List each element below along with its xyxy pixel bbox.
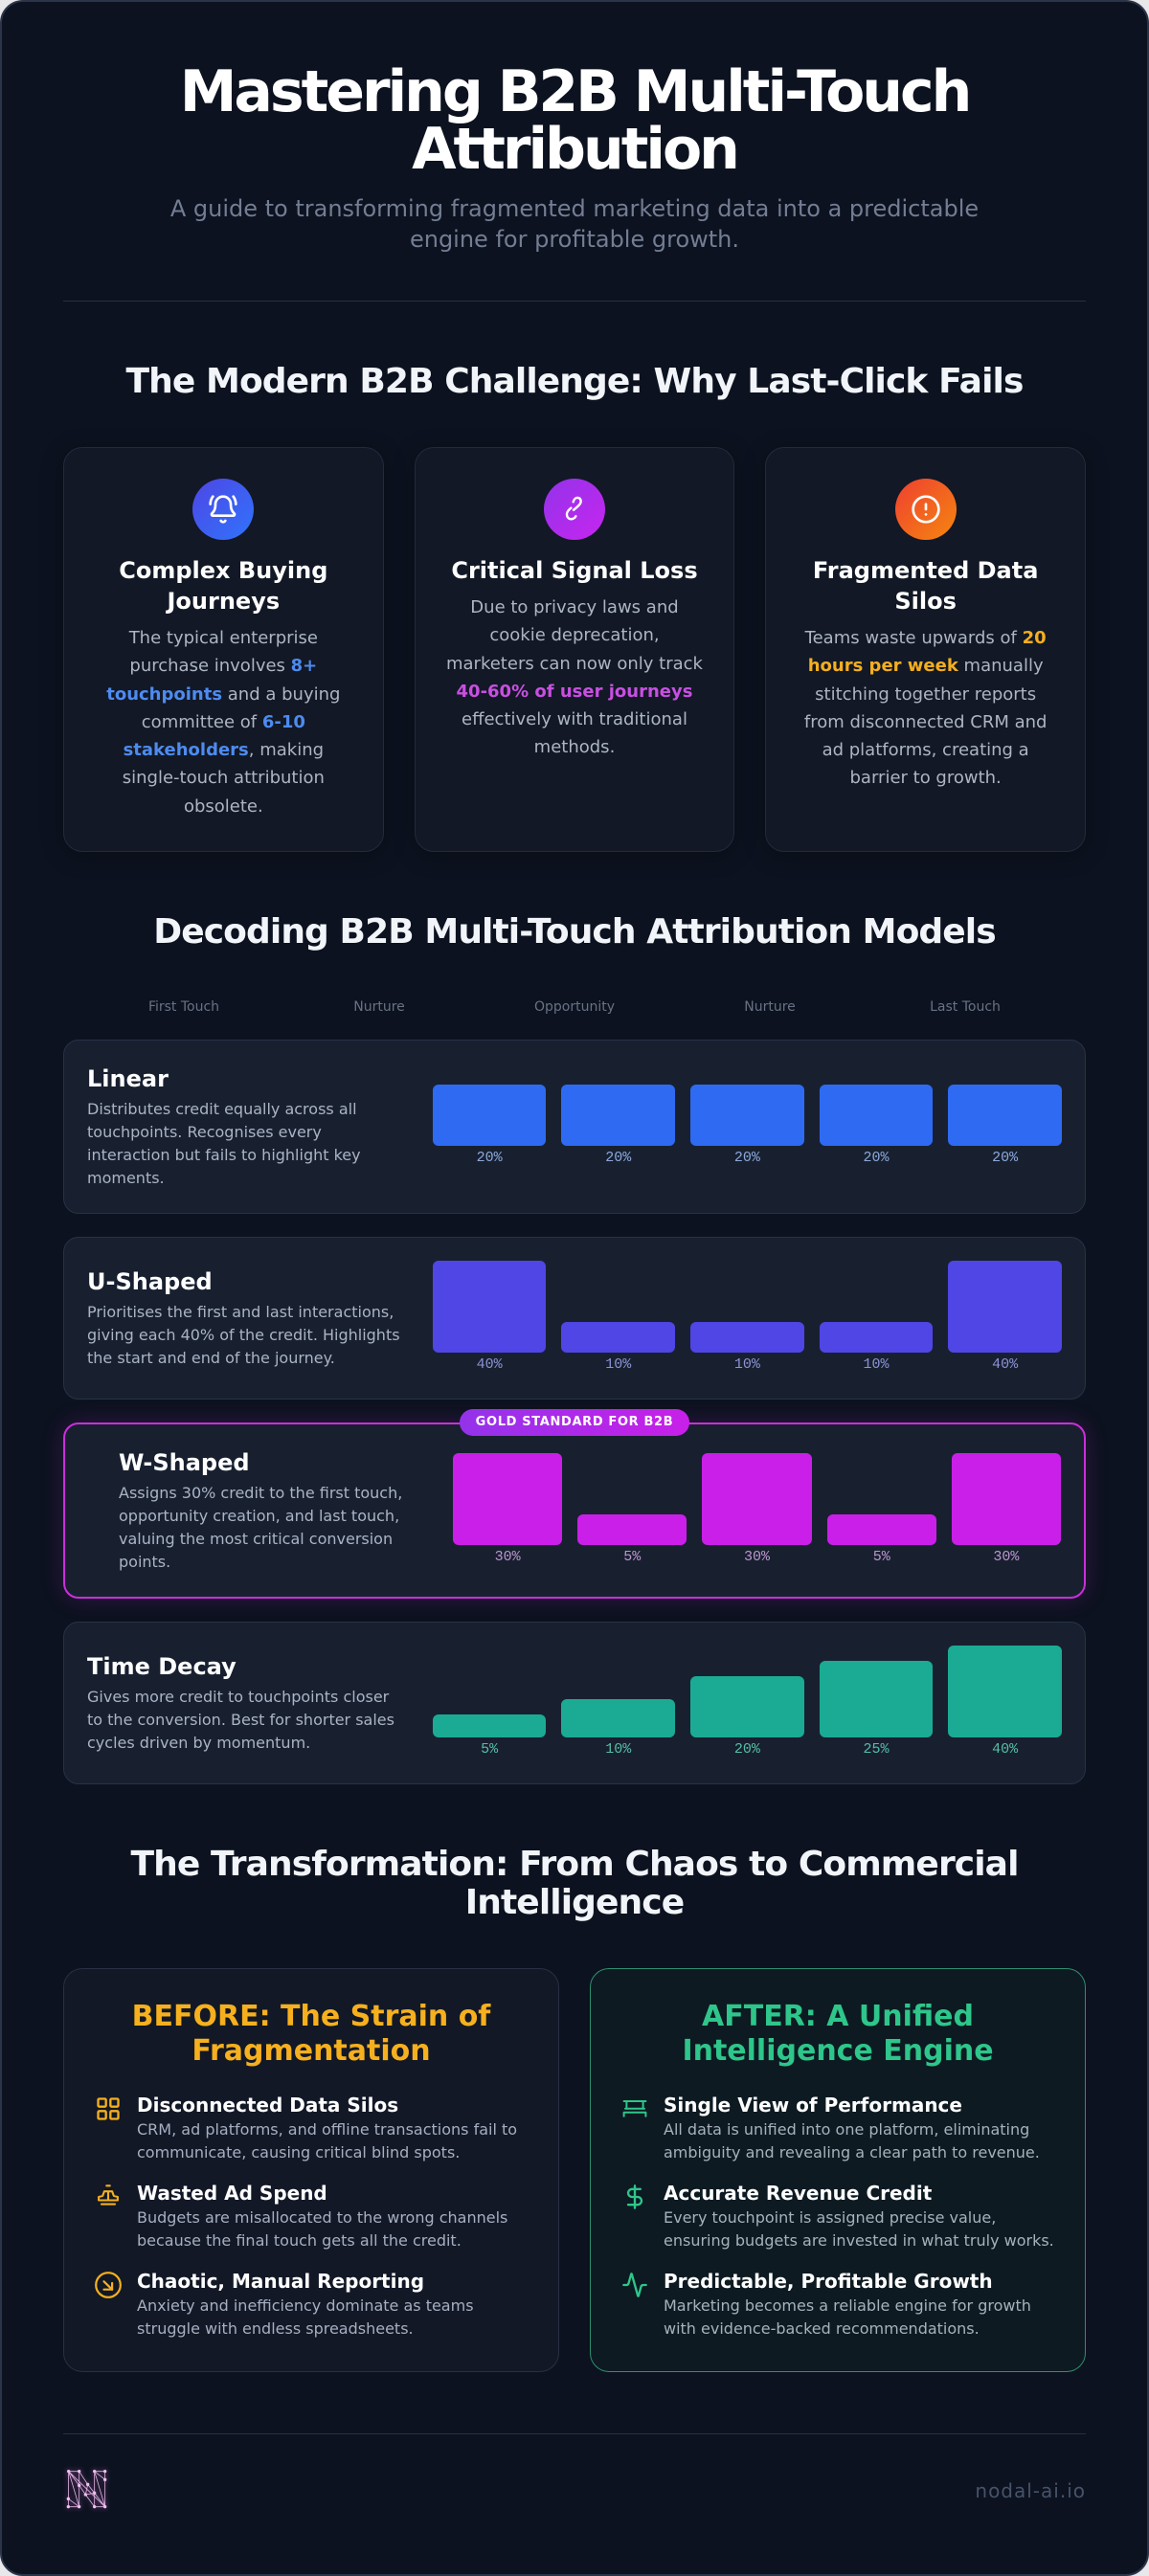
item: accurate revenue credit: Accurate Revenue Credit [664, 2182, 932, 2205]
item: disconnected data silos [97, 2094, 517, 2162]
panel: before [63, 1968, 559, 2372]
panel: linear model: 20% [864, 1150, 890, 1166]
card text: 40-60% of user journeys [457, 682, 692, 702]
model description: the start and end of the journey. [87, 1349, 335, 1367]
item: single view of performance: All data is unified into one platform, eliminating [664, 2120, 1029, 2139]
bar: last touch 40% [948, 1646, 1062, 1758]
heading: the transformation [130, 1845, 1019, 1922]
subtitle: engine for profitable growth. [410, 226, 739, 253]
item: single view of performance: ambiguity and revealing a clear path to revenue. [664, 2143, 1040, 2162]
bar: last touch 40% [948, 1261, 1062, 1373]
item: single view of performance [621, 2092, 1054, 2164]
panel: u-shaped model: 10% [864, 1356, 890, 1373]
panel: linear model: 20% [605, 1150, 631, 1166]
footer url: nodal-ai.io [975, 2479, 1086, 2502]
before heading: BEFORE: The Strain of [132, 2000, 490, 2033]
panel: u-shaped model: 10% [605, 1356, 631, 1373]
panel: u-shaped model: 10% [734, 1356, 760, 1373]
bar: opportunity 20% [690, 1676, 804, 1758]
title: Mastering B2B Multi-Touch [180, 58, 969, 125]
model description: touchpoints. Recognises every [87, 1123, 322, 1141]
card text: single-touch attribution [123, 768, 325, 788]
panel: time decay model [63, 1622, 1086, 1784]
icon: unified view [621, 2095, 648, 2122]
model description: Gives more credit to touchpoints closer [87, 1688, 389, 1706]
item: disconnected data silos: Disconnected Data Silos [137, 2094, 398, 2117]
item: wasted ad spend: Wasted Ad Spend [137, 2182, 327, 2205]
panel: complex buying journeys [63, 447, 384, 852]
panel: w-shaped model: 5% [873, 1549, 890, 1565]
panel: linear model [63, 1040, 1086, 1214]
model description: to the conversion. Best for shorter sales [87, 1711, 394, 1729]
model description: cycles driven by momentum. [87, 1734, 310, 1752]
panel: w-shaped model [63, 1422, 1086, 1599]
icon: link [544, 479, 605, 540]
label: nurture: Nurture [744, 999, 796, 1015]
panel: linear model: 20% [992, 1150, 1018, 1166]
item: chaotic manual reporting: Chaotic, Manual Reporting [137, 2270, 424, 2293]
bar: nurture 5% [827, 1514, 936, 1565]
card title [813, 557, 1038, 615]
panel: after [590, 1968, 1086, 2372]
model description: opportunity creation, and last touch, [119, 1507, 399, 1525]
bar chart: w-shaped [453, 1453, 1061, 1565]
card text [106, 628, 340, 816]
icon: grid [95, 2095, 122, 2122]
journey stage labels [148, 999, 1001, 1015]
card text: from disconnected CRM and [804, 712, 1047, 732]
card title [119, 557, 327, 615]
model description: Prioritises the first and last interactions, [87, 1303, 394, 1321]
card text: methods. [534, 737, 615, 757]
bar: opportunity 10% [690, 1322, 804, 1373]
card title: Critical Signal Loss [451, 557, 698, 584]
panel: time decay model: 25% [864, 1741, 890, 1758]
model description: Linear [87, 1065, 169, 1092]
model description: giving each 40% of the credit. Highlights [87, 1326, 400, 1344]
panel: u-shaped model: 40% [992, 1356, 1018, 1373]
icon: activity [621, 2272, 648, 2298]
model description [119, 1449, 402, 1571]
subtitle: A guide to transforming fragmented marketing data into a predictable [170, 195, 979, 222]
bar: nurture 10% [561, 1322, 675, 1373]
bar chart: u-shaped [433, 1261, 1062, 1373]
card text: ad platforms, creating a [822, 740, 1029, 760]
model description: Assigns 30% credit to the first touch, [119, 1484, 402, 1502]
bar: opportunity 20% [690, 1085, 804, 1166]
panel: time decay model: 20% [734, 1741, 760, 1758]
label: first touch: First Touch [148, 999, 219, 1015]
item: predictable profitable growth: Marketing becomes a reliable engine for growth [664, 2296, 1031, 2315]
label: nurture: Nurture [353, 999, 405, 1015]
bar: nurture 25% [820, 1661, 933, 1758]
card text: effectively with traditional [462, 709, 687, 729]
model description: U-Shaped [87, 1268, 213, 1295]
panel: w-shaped model: 30% [993, 1549, 1019, 1565]
model description: moments. [87, 1169, 165, 1187]
model description [87, 1268, 400, 1367]
after heading: AFTER: A Unified [702, 2000, 974, 2033]
bar: first touch 40% [433, 1261, 546, 1373]
item: predictable profitable growth [621, 2268, 1054, 2341]
badge: gold standard: GOLD STANDARD FOR B2B [476, 1415, 673, 1429]
card text: committee of 6-10 [142, 712, 305, 732]
bar: nurture 20% [820, 1085, 933, 1166]
bar chart: linear [433, 1085, 1062, 1166]
card title: Fragmented Data [813, 557, 1038, 584]
card text: Due to privacy laws and [470, 597, 679, 617]
item: wasted ad spend: because the final touch gets all the credit. [137, 2231, 462, 2250]
item: accurate revenue credit [621, 2180, 1054, 2252]
model description: Distributes credit equally across all [87, 1100, 357, 1118]
heading: decoding models: Decoding B2B Multi-Touch Attribution Models [153, 912, 996, 952]
panel: u-shaped model [63, 1237, 1086, 1400]
title [180, 58, 969, 183]
item: accurate revenue credit: Every touchpoint is assigned precise value, [664, 2208, 996, 2227]
card text: barrier to growth. [850, 768, 1002, 788]
panel: time decay model: 5% [481, 1741, 498, 1758]
item: accurate revenue credit: ensuring budgets are invested in what truly works. [664, 2231, 1054, 2250]
panel: w-shaped model: 5% [623, 1549, 641, 1565]
card text: marketers can now only track [446, 653, 703, 674]
card text: stakeholders, making [124, 740, 324, 760]
panel: critical signal loss [415, 447, 734, 852]
bar: last touch 30% [952, 1453, 1061, 1565]
card text [804, 628, 1047, 788]
card text: Teams waste upwards of 20 [805, 628, 1047, 648]
footer logo [63, 2465, 109, 2511]
card text: The typical enterprise [129, 628, 318, 648]
heading: the modern B2B challenge: The Modern B2B Challenge: Why Last-Click Fails [126, 362, 1023, 401]
before heading: Fragmentation [192, 2034, 431, 2068]
panel: w-shaped model: 30% [744, 1549, 770, 1565]
before heading [132, 2000, 491, 2068]
item: disconnected data silos: communicate, causing critical blind spots. [137, 2143, 460, 2162]
item: predictable profitable growth: with evidence-backed recommendations. [664, 2319, 980, 2338]
card text: obsolete. [184, 796, 263, 816]
model description [87, 1653, 394, 1752]
after heading [621, 2000, 1054, 2069]
model description: valuing the most critical conversion [119, 1530, 393, 1548]
item: wasted ad spend: Budgets are misallocated to the wrong channels [137, 2208, 507, 2227]
bar: nurture 20% [561, 1085, 675, 1166]
card text: purchase involves 8+ [129, 656, 317, 676]
card title: Journeys [167, 588, 280, 615]
model description: interaction but fails to highlight key [87, 1146, 361, 1164]
item: chaotic manual reporting: struggle with endless spreadsheets. [137, 2319, 414, 2338]
bar: nurture 10% [820, 1322, 933, 1373]
badge: gold standard [460, 1409, 689, 1436]
heading: the transformation: Intelligence [465, 1883, 684, 1922]
bar: nurture 10% [561, 1699, 675, 1758]
card text: hours per week manually [808, 656, 1044, 676]
panel: fragmented data silos [765, 447, 1086, 852]
card text: touchpoints and a buying [106, 683, 340, 705]
item: disconnected data silos: CRM, ad platforms, and offline transactions fail to [137, 2120, 517, 2139]
subtitle [170, 195, 979, 253]
panel: linear model: 20% [734, 1150, 760, 1166]
panel: w-shaped model: 30% [495, 1549, 521, 1565]
header [170, 58, 979, 253]
card title: Complex Buying [119, 557, 327, 584]
bar: first touch 30% [453, 1453, 562, 1565]
icon: scale [95, 2184, 122, 2210]
bar: first touch 20% [433, 1085, 546, 1166]
item: single view of performance: Single View of Performance [664, 2094, 962, 2117]
icon: arrow in circle [95, 2272, 122, 2298]
card text [446, 597, 703, 757]
icon: alert [895, 479, 957, 540]
bar: first touch 5% [433, 1714, 546, 1758]
card title: Silos [894, 588, 957, 615]
panel: u-shaped model: 40% [477, 1356, 503, 1373]
card text: stitching together reports [815, 683, 1036, 705]
label: opportunity: Opportunity [534, 999, 615, 1015]
item: chaotic manual reporting: Anxiety and inefficiency dominate as teams [137, 2296, 474, 2315]
label: last touch: Last Touch [930, 999, 1001, 1015]
after heading: Intelligence Engine [682, 2034, 994, 2068]
title: Attribution [412, 116, 737, 183]
item: wasted ad spend [95, 2180, 528, 2252]
bar: nurture 5% [577, 1514, 687, 1565]
panel: time decay model: 10% [605, 1741, 631, 1758]
model description: W-Shaped [119, 1449, 250, 1476]
item: chaotic manual reporting [95, 2268, 528, 2341]
card text: cookie deprecation, [489, 625, 660, 645]
model description [87, 1065, 361, 1187]
model description: points. [119, 1553, 170, 1571]
model description: Time Decay [87, 1653, 237, 1680]
panel: linear model: 20% [477, 1150, 503, 1166]
bar: opportunity 30% [702, 1453, 812, 1565]
icon: dollar [621, 2184, 648, 2210]
item: predictable profitable growth: Predictable, Profitable Growth [664, 2270, 993, 2293]
bar chart: time decay [433, 1646, 1062, 1758]
bar: last touch 20% [948, 1085, 1062, 1166]
icon: bell [192, 479, 254, 540]
panel: time decay model: 40% [992, 1741, 1018, 1758]
heading: the transformation: The Transformation: From Chaos to Commercial [130, 1845, 1019, 1884]
